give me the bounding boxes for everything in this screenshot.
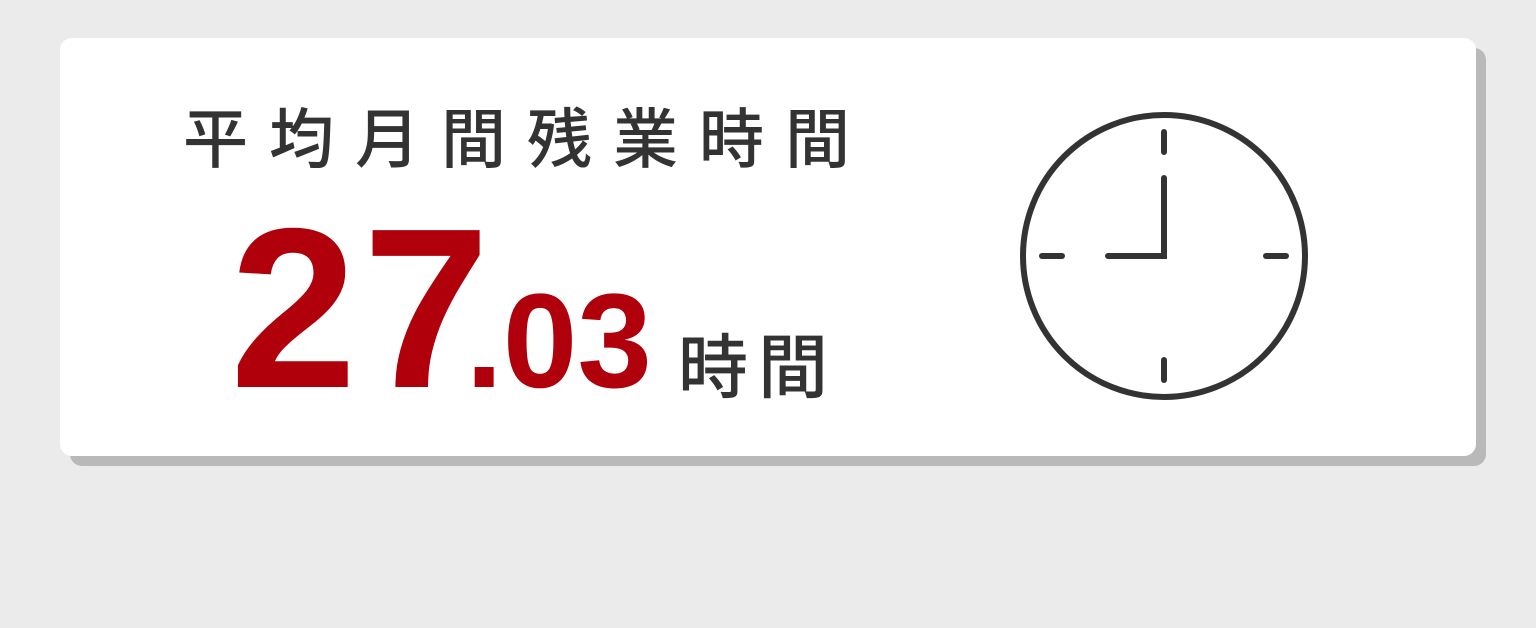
title: 平均月間残業時間 xyxy=(183,87,871,181)
number value: 27.03 xyxy=(230,182,652,436)
card panel xyxy=(60,38,1476,456)
unit label: 時間 xyxy=(678,312,838,413)
card shadow xyxy=(70,48,1486,466)
icon: clock xyxy=(1020,112,1308,400)
